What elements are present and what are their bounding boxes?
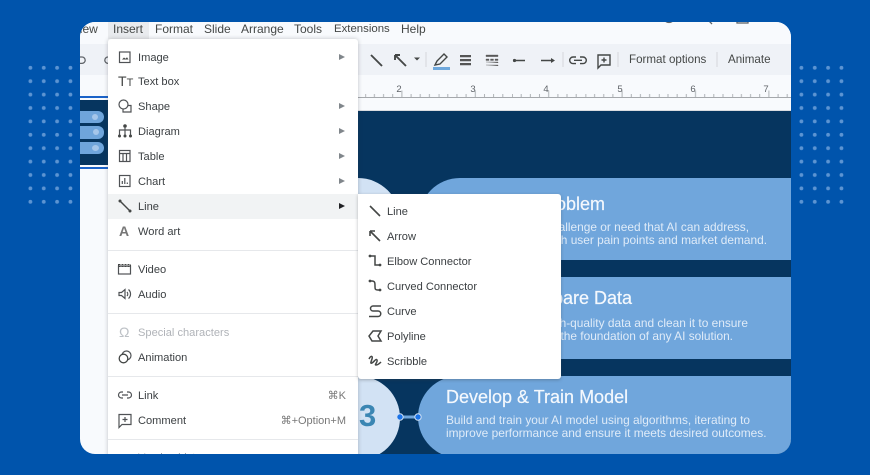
text box item (118, 73, 180, 89)
animation item (118, 350, 187, 364)
ruler: 4 (543, 84, 549, 95)
step 2 row: it is reliable, the foundation of any AI solution. (494, 329, 733, 343)
link item: ⌘K (328, 390, 346, 402)
line item: Line (138, 201, 159, 213)
scribble option: Scribble (387, 356, 427, 368)
table item: Table (138, 151, 165, 163)
ruler: 5 (617, 84, 623, 95)
toolbar: Animate (728, 53, 771, 66)
shape item: Shape (138, 101, 170, 113)
app window screenshot (80, 22, 791, 454)
video item: Video (138, 264, 166, 276)
word art item: Word art (138, 226, 180, 238)
table item (118, 150, 345, 163)
step 1 row (358, 178, 791, 260)
link item: Link (138, 390, 158, 402)
ruler: 2 (396, 84, 402, 95)
special characters item: Ω (119, 324, 129, 340)
step number: 3 (359, 398, 376, 433)
menu bar: Extensions (334, 23, 390, 35)
toolbar (80, 44, 791, 75)
line option: Line (387, 206, 408, 218)
toolbar: Format options (629, 53, 706, 66)
step 2 row: Gather high-quality data and clean it to ensure (504, 316, 748, 330)
audio item: Audio (138, 289, 166, 301)
step 1 row: Identify the Problem (445, 194, 605, 214)
menu bar: Slide (204, 22, 231, 36)
undo redo icons (80, 56, 108, 64)
ruler: 6 (690, 84, 696, 95)
link item (118, 390, 346, 402)
chart item: Chart (138, 176, 165, 188)
video item (118, 264, 166, 276)
chart item (118, 174, 345, 188)
slide canvas (118, 111, 791, 454)
polyline option (368, 330, 426, 343)
line option (370, 205, 408, 218)
diagram item: Diagram (138, 126, 180, 138)
animation item: Animation (138, 352, 187, 364)
comment item: ⌘+Option+M (281, 415, 346, 427)
insert menu (108, 39, 358, 459)
line tools (370, 52, 718, 70)
text box item: Text box (138, 76, 179, 88)
line submenu (358, 194, 561, 379)
curved connector option: Curved Connector (387, 281, 477, 293)
special characters item (119, 324, 229, 340)
scribble option (368, 356, 427, 368)
step 2 row: Collect & Prepare Data (448, 288, 632, 308)
comment item: Comment (138, 415, 186, 427)
slide thumbnail (80, 96, 108, 169)
step 3 row: Develop & Train Model (446, 387, 628, 407)
selected connector (397, 413, 422, 421)
menu bar: Insert (113, 22, 143, 36)
dot pattern left (28, 66, 72, 204)
menu bar: Format (155, 22, 193, 36)
text box item: TT (118, 73, 133, 89)
special characters item: Special characters (138, 327, 229, 339)
diagram item (118, 124, 345, 138)
line item (118, 200, 345, 213)
step 1 row: ensuring it aligns with user pain points and market demand. (454, 233, 767, 247)
step 3 row: Build and train your AI model using algorithms, iterating to (446, 413, 750, 427)
word art item (119, 223, 180, 239)
image item: Image (138, 52, 169, 64)
menu bar: Help (401, 22, 426, 36)
step 3 row: improve performance and ensure it meets desired outcomes. (446, 426, 767, 440)
curve option: Curve (387, 306, 417, 318)
arrow option (369, 230, 416, 243)
step 3 row (358, 376, 791, 454)
arrow option: Arrow (387, 231, 416, 243)
menu bar: Arrange (241, 22, 284, 36)
curve option (369, 305, 417, 318)
menu bar (80, 22, 791, 44)
audio item (118, 288, 166, 301)
dot pattern right (800, 66, 844, 204)
step 1 row: Identify a challenge or need that AI can address, (494, 220, 749, 234)
cropped title bar icons (666, 22, 749, 24)
elbow connector option: Elbow Connector (387, 256, 471, 268)
ruler: 7 (763, 84, 769, 95)
ruler (358, 84, 791, 111)
shape item (118, 99, 345, 113)
word art item: A (119, 223, 129, 239)
polyline option: Polyline (387, 331, 426, 343)
menu bar: Tools (294, 22, 322, 36)
image item (118, 51, 345, 64)
step 2 row (448, 277, 791, 359)
ruler: 3 (470, 84, 476, 95)
comment item (118, 414, 346, 429)
hovered line row (108, 194, 358, 219)
